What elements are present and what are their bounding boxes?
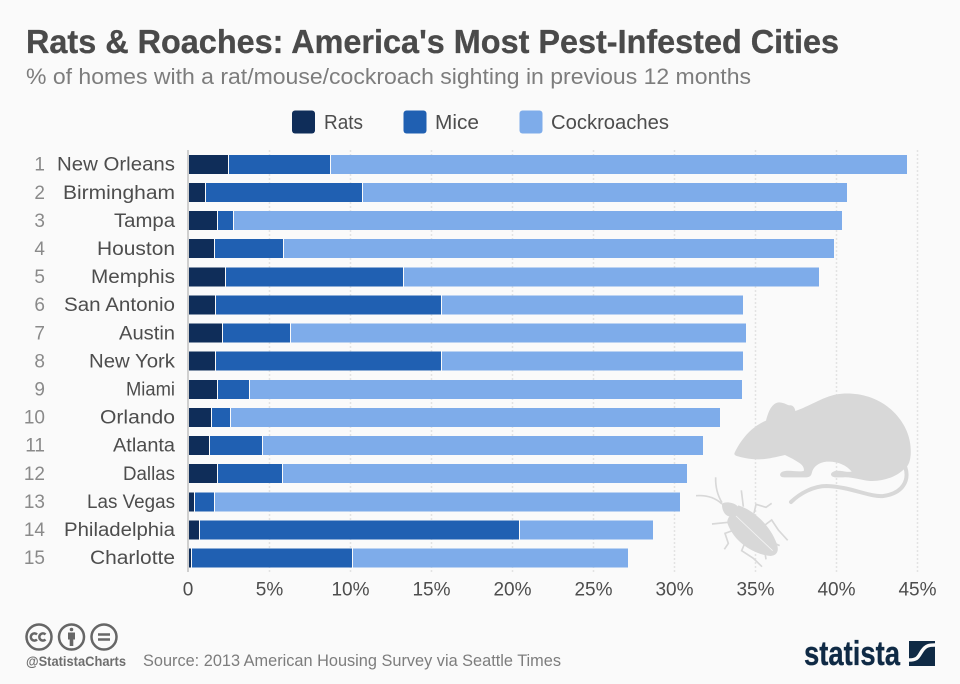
x axis labels: 30% <box>655 580 694 600</box>
row 15: Charlotte: 15 <box>24 548 45 569</box>
subtitle: % of homes with a rat/mouse/cockroach sighting in previous 12 months <box>26 64 751 89</box>
row 7: Austin: 7 <box>34 323 45 344</box>
row 12: Dallas: Dallas <box>123 464 175 485</box>
row 9: Miami <box>34 380 742 400</box>
row 8: New York <box>34 351 743 372</box>
row 7: Austin: Austin <box>119 323 175 344</box>
legend item: cockroaches: Cockroaches <box>551 112 669 134</box>
row 4: Houston <box>34 239 834 260</box>
row 14: Philadelphia: Philadelphia <box>64 520 175 541</box>
row 10: Orlando: 10 <box>24 408 45 429</box>
row 3: Tampa: 3 <box>34 211 45 232</box>
row 7: Austin <box>34 323 746 344</box>
legend item: rats <box>292 110 363 134</box>
legend <box>292 110 669 134</box>
social handle: @StatistaCharts <box>26 654 126 669</box>
legend item: mice <box>404 110 479 134</box>
logo: statista: statista <box>804 635 901 673</box>
row 11: Atlanta <box>25 436 703 457</box>
row 12: Dallas: 12 <box>24 464 45 485</box>
row 3: Tampa <box>34 211 842 232</box>
x axis labels: 10% <box>331 580 370 600</box>
row 6: San Antonio: 6 <box>34 295 45 316</box>
row 5: Memphis: 5 <box>34 267 45 288</box>
title: Rats & Roaches: America's Most Pest-Infested Cities <box>26 23 839 60</box>
row 9: Miami: Miami <box>126 380 175 400</box>
row 1: New Orleans: New Orleans <box>57 155 175 176</box>
x axis labels: 5% <box>256 580 283 600</box>
icon: cockroach <box>696 477 788 567</box>
bar chart <box>24 155 907 569</box>
row 8: New York: New York <box>89 351 176 372</box>
x axis labels: 25% <box>574 580 613 600</box>
row 11: Atlanta: Atlanta <box>113 436 175 457</box>
legend item: mice: Mice <box>435 112 479 134</box>
row 13: Las Vegas <box>24 492 680 513</box>
x axis labels: 15% <box>412 580 451 600</box>
icon: rat <box>734 394 911 502</box>
icon: creative commons licence <box>26 624 116 650</box>
row 15: Charlotte: Charlotte <box>90 548 175 569</box>
x axis labels <box>183 580 937 600</box>
row 2: Birmingham <box>34 183 847 204</box>
row 1: New Orleans <box>34 155 907 176</box>
row 4: Houston: 4 <box>34 239 45 260</box>
row 8: New York: 8 <box>34 351 45 372</box>
row 9: Miami: 9 <box>34 380 45 400</box>
x axis labels: 20% <box>493 580 532 600</box>
row 10: Orlando: Orlando <box>100 408 175 429</box>
row 11: Atlanta: 11 <box>25 436 45 457</box>
row 3: Tampa: Tampa <box>114 211 175 232</box>
row 13: Las Vegas: 13 <box>24 492 45 513</box>
row 15: Charlotte <box>24 548 628 569</box>
row 2: Birmingham: Birmingham <box>63 183 175 204</box>
row 5: Memphis: Memphis <box>91 267 175 288</box>
source: Source: 2013 American Housing Survey via Seattle Times <box>143 652 561 670</box>
x axis labels: 45% <box>898 580 937 600</box>
row 10: Orlando <box>24 408 720 429</box>
row 2: Birmingham: 2 <box>34 183 45 204</box>
row 6: San Antonio: San Antonio <box>64 295 175 316</box>
axis line <box>187 150 189 572</box>
legend item: rats: Rats <box>324 112 363 134</box>
row 5: Memphis <box>34 267 819 288</box>
row 4: Houston: Houston <box>97 239 175 260</box>
row 14: Philadelphia: 14 <box>24 520 45 541</box>
row 1: New Orleans: 1 <box>34 155 45 176</box>
x axis labels: 35% <box>736 580 775 600</box>
x axis labels: 40% <box>817 580 856 600</box>
row 12: Dallas <box>24 464 687 485</box>
x axis labels: 0 <box>183 580 193 600</box>
row 6: San Antonio <box>34 295 743 316</box>
row 14: Philadelphia <box>24 520 653 541</box>
row 13: Las Vegas: Las Vegas <box>87 492 175 513</box>
